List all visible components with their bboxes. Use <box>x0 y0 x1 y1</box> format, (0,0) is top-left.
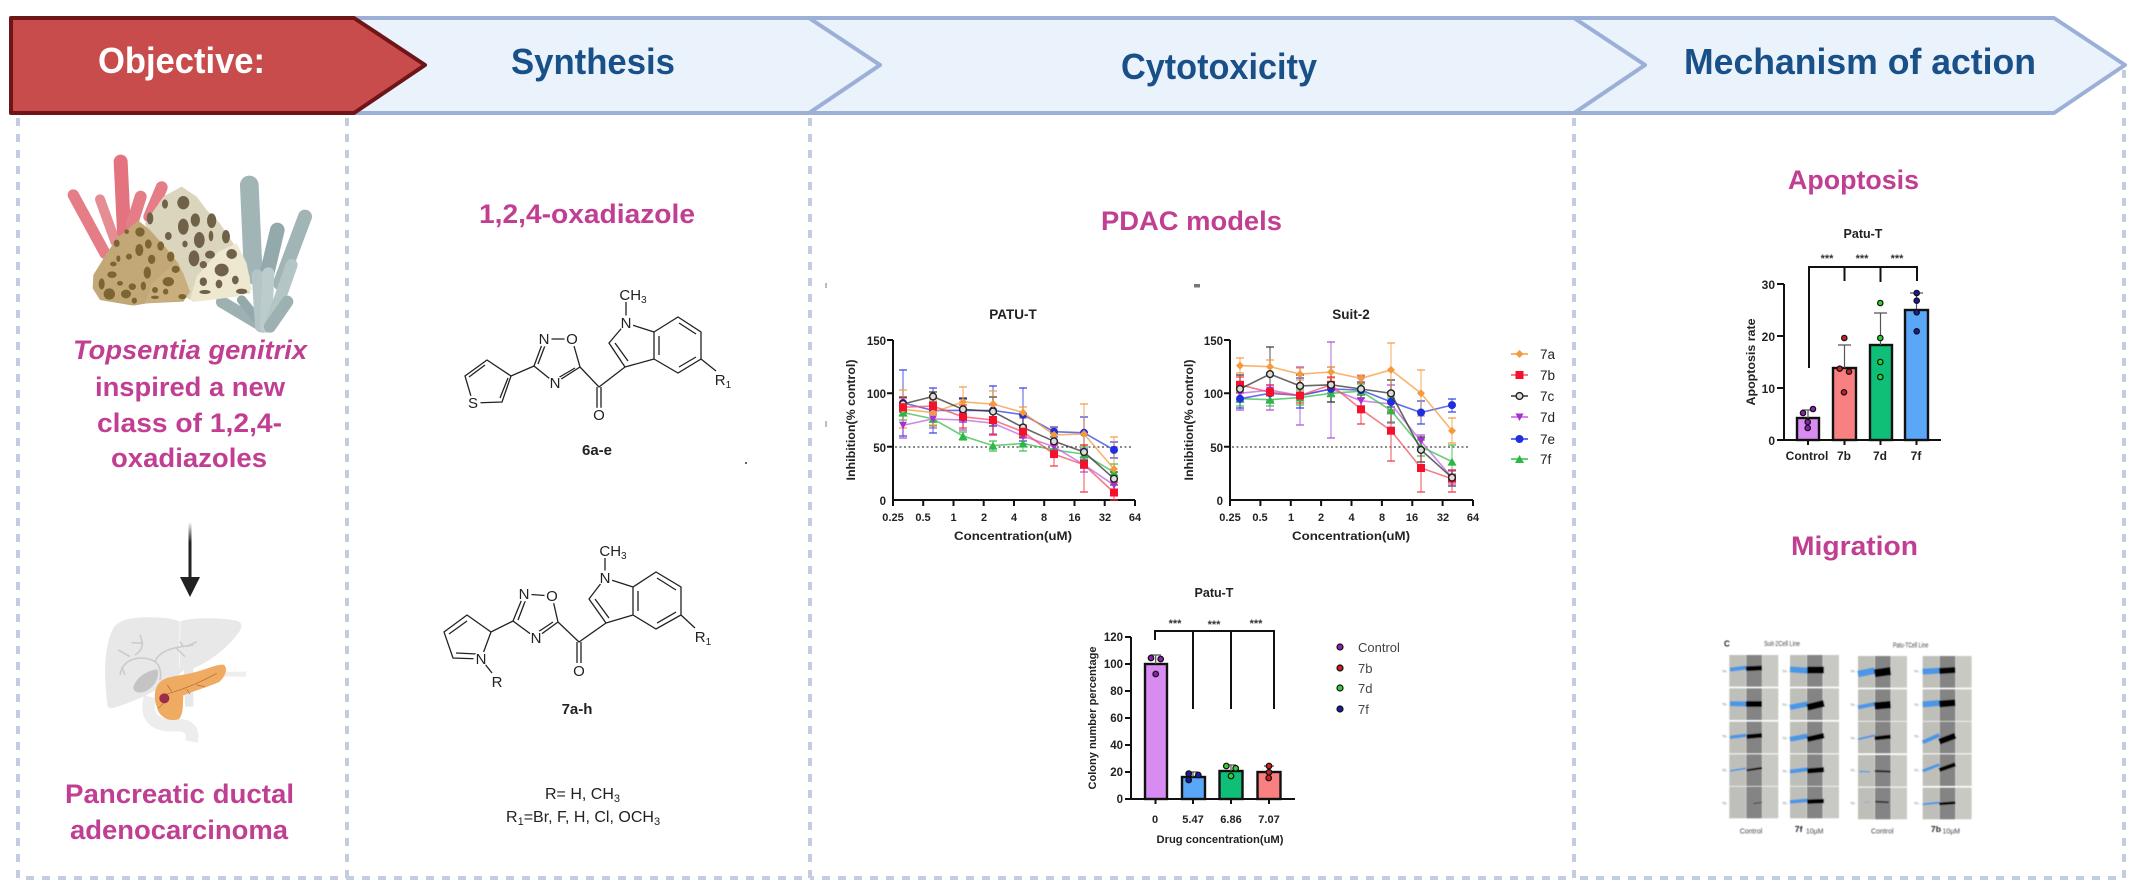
text: disease label: adenocarcinoma <box>70 815 289 845</box>
bar chart: apoptosis rate: 30 <box>1762 278 1775 292</box>
bar chart: apoptosis rate: Patu-T <box>1844 227 1883 241</box>
line chart: PATU-T: 16 <box>1068 512 1081 524</box>
bar chart: apoptosis rate: 7d <box>1873 449 1887 463</box>
bar chart: apoptosis rate: 10 <box>1762 382 1775 396</box>
chemical structure: 6a-e: O <box>566 331 578 348</box>
text: sponge caption: Topsentia genitrix <box>73 335 308 365</box>
chemical structure: 6a-e: 1 <box>726 380 732 391</box>
text: substituents: R <box>506 809 518 826</box>
text: substituents: R= H, CH <box>545 786 614 803</box>
figure: wound healing micrographs: T4 - <box>1914 669 1920 673</box>
figure: wound healing micrographs: T4 - <box>1782 736 1788 740</box>
figure: wound healing micrographs: T4 - <box>1722 735 1728 739</box>
figure: wound healing micrographs: 10µM <box>1942 828 1960 835</box>
chevron: mechanism of action: Mechanism of action <box>1684 41 2036 82</box>
legend: colony chart: 7b <box>1358 661 1372 676</box>
chevron: objective <box>11 18 425 113</box>
figure: wound healing micrographs: 7b <box>1931 824 1941 834</box>
bar chart: colony number: 5.47 <box>1182 814 1204 826</box>
chemical structure: 6a-e: O <box>593 407 605 424</box>
header: process chevrons <box>11 18 2125 113</box>
bar chart: apoptosis rate <box>1744 227 1941 463</box>
chemical structure: 6a-e: N <box>539 331 549 348</box>
legend: compounds 7a to 7f: 7a <box>1540 347 1556 362</box>
heading: Migration: Migration <box>1791 531 1918 561</box>
line chart: PATU-T: 32 <box>1099 512 1111 524</box>
chemical structure: 7a-h: O <box>573 663 585 680</box>
bar chart: apoptosis rate: 7b <box>1837 449 1851 463</box>
chevron: cytotoxicity: Cytotoxicity <box>1121 46 1317 87</box>
line chart: PATU-T: 100 <box>867 389 886 401</box>
chemical structure: 7a-h: O <box>546 588 558 605</box>
chemical structure: 6a-e: 6a-e <box>582 442 612 459</box>
line chart: Suit-2: 1 <box>1288 512 1294 524</box>
line chart: PATU-T: 50 <box>873 443 886 455</box>
chemical structure: 6a-e: S <box>468 395 478 412</box>
figure: wound healing micrographs: Patu-TCell Line <box>1893 643 1928 650</box>
text: substituents: 3 <box>614 793 620 805</box>
legend: compounds 7a to 7f <box>1511 347 1556 467</box>
chevron: synthesis: Synthesis <box>511 41 675 82</box>
bar chart: colony number: Patu-T <box>1195 586 1234 600</box>
figure: wound healing micrographs: Suit-2Cell Line <box>1764 641 1800 648</box>
figure: wound healing micrographs: T4 - <box>1850 736 1856 740</box>
chemical structure: 7a-h: N <box>531 630 541 647</box>
figure: wound healing micrographs: T0 - <box>1782 770 1788 774</box>
line chart: Suit-2: 4 <box>1348 512 1355 524</box>
bar chart: colony number: 40 <box>1110 740 1123 752</box>
figure: wound healing micrographs: T0 - <box>1914 801 1920 805</box>
bar chart: colony number <box>1087 586 1295 846</box>
chemical structure: 7a-h: R <box>492 674 503 691</box>
line chart: PATU-T: 8 <box>1041 512 1047 524</box>
figure: wound healing micrographs: T4 - <box>1914 703 1920 707</box>
chemical structure: 7a-h: N <box>600 570 610 587</box>
bar chart: colony number: 7.07 <box>1258 814 1280 826</box>
bar chart: colony number: *** <box>1169 618 1182 630</box>
figure: wound healing micrographs: T0 - <box>1782 801 1788 805</box>
chemical structure: 6a-e: R <box>715 372 726 389</box>
heading: Apoptosis: Apoptosis <box>1788 165 1919 195</box>
text: sponge caption <box>73 335 308 473</box>
figure: wound healing micrographs: T4 - <box>1782 669 1788 673</box>
chemical structure: 7a-h: 1 <box>706 637 712 648</box>
bar chart: apoptosis rate: 7f <box>1911 449 1922 463</box>
chemical structure: 7a-h: 7a-h <box>562 701 592 718</box>
legend: compounds 7a to 7f: 7c <box>1540 389 1555 404</box>
figure: wound healing micrographs: T0 - <box>1850 768 1856 772</box>
figure: wound healing micrographs: T0 - <box>1722 801 1728 805</box>
figure: wound healing micrographs: T4 - <box>1722 669 1728 673</box>
chemical structure: 6a-e <box>465 287 732 459</box>
text: disease label: Pancreatic ductal <box>65 779 294 809</box>
chemical structure: 6a-e: N <box>550 375 560 392</box>
panel: objective <box>18 118 347 878</box>
chemical structure: 7a-h: N <box>476 651 486 668</box>
figure: wound healing micrographs: T0 - <box>1914 768 1920 772</box>
bar chart: colony number: Drug concentration(uM) <box>1156 834 1284 846</box>
panel: mechanism of action <box>1574 70 2124 878</box>
chemical structure: 6a-e: 3 <box>641 295 647 306</box>
text: substituents <box>506 786 660 828</box>
bar chart: colony number: 0 <box>1152 814 1158 826</box>
chemical structure: 6a-e: N <box>621 315 631 332</box>
line chart: PATU-T: 0.25 <box>882 512 904 524</box>
chevron: mechanism of action <box>1574 18 2125 113</box>
line chart: Suit-2: Concentration(uM) <box>1292 529 1410 543</box>
bar chart: colony number: 80 <box>1110 686 1123 698</box>
figure: wound healing micrographs: T4 - <box>1850 669 1856 673</box>
text: sponge caption: class of 1,2,4- <box>97 408 282 438</box>
line chart: PATU-T: 1 <box>950 512 957 524</box>
chemical structure: 7a-h: CH <box>599 543 621 560</box>
bar chart: apoptosis rate: Control <box>1786 449 1828 463</box>
figure: wound healing micrographs: Control <box>1871 828 1894 835</box>
chemical structure: 7a-h: 3 <box>621 551 627 562</box>
text: substituents: 3 <box>654 816 660 828</box>
legend: compounds 7a to 7f: 7d <box>1540 410 1555 425</box>
line chart: Suit-2: 50 <box>1210 443 1223 455</box>
text: substituents: =Br, F, H, Cl, OCH <box>524 809 654 826</box>
figure: wound healing micrographs: T0 - <box>1850 801 1856 805</box>
chemical structure: 7a-h <box>444 543 712 718</box>
line chart: PATU-T: 64 <box>1129 512 1142 524</box>
line chart: PATU-T: 0 <box>880 496 886 508</box>
legend: colony chart: 7d <box>1358 681 1372 696</box>
bar chart: colony number: 60 <box>1110 713 1123 725</box>
bar chart: apoptosis rate: *** <box>1891 253 1904 265</box>
line chart: Suit-2: 64 <box>1467 512 1480 524</box>
bar chart: colony number: 120 <box>1104 632 1123 644</box>
panel: cytotoxicity <box>810 118 1574 878</box>
line chart: Suit-2: Inhibition(% control) <box>1182 360 1196 480</box>
bar chart: colony number: 100 <box>1104 659 1123 671</box>
line chart: PATU-T: 4 <box>1011 512 1018 524</box>
bar chart: apoptosis rate: 20 <box>1762 330 1775 344</box>
text: sponge caption: oxadiazoles <box>111 443 267 473</box>
chevron: synthesis <box>354 18 880 113</box>
legend: colony chart: 7f <box>1358 702 1369 717</box>
line chart: PATU-T: Inhibition(% control) <box>844 360 858 480</box>
illustration: liver and pancreas <box>105 617 246 742</box>
text: disease label <box>65 779 294 845</box>
bar chart: colony number: *** <box>1250 618 1263 630</box>
line chart: PATU-T: 150 <box>867 336 886 348</box>
bar chart: colony number: 6.86 <box>1220 814 1242 826</box>
legend: compounds 7a to 7f: 7f <box>1540 452 1552 467</box>
line chart: Suit-2: Suit-2 <box>1332 307 1370 322</box>
line chart: Suit-2: 32 <box>1437 512 1449 524</box>
figure: wound healing micrographs: T4 - <box>1722 702 1728 706</box>
bar chart: colony number: 0 <box>1117 794 1123 806</box>
legend: colony chart <box>1337 640 1400 717</box>
bar chart: apoptosis rate: 0 <box>1768 434 1775 448</box>
illustration: Topsentia genitrix sponge <box>73 162 305 327</box>
chevron: objective: Objective: <box>98 40 265 81</box>
legend: colony chart: Control <box>1358 640 1400 655</box>
figure: wound healing micrographs: Control <box>1740 828 1763 835</box>
bar chart: apoptosis rate: *** <box>1856 253 1869 265</box>
line chart: PATU-T: 2 <box>981 512 987 524</box>
line chart: Suit-2: 0.5 <box>1252 512 1268 524</box>
legend: compounds 7a to 7f: 7b <box>1540 368 1555 383</box>
bar chart: colony number: *** <box>1208 619 1221 631</box>
figure: wound healing micrographs: T4 - <box>1850 703 1856 707</box>
line chart: Suit-2: 100 <box>1204 389 1223 401</box>
bar chart: apoptosis rate: Apoptosis rate <box>1744 318 1758 406</box>
line chart: Suit-2: 0 <box>1217 496 1223 508</box>
heading: PDAC models: PDAC models <box>1101 206 1282 236</box>
bar chart: apoptosis rate: *** <box>1821 253 1834 265</box>
chevron: cytotoxicity <box>809 18 1645 113</box>
figure: wound healing micrographs: T4 - <box>1914 735 1920 739</box>
figure: wound healing micrographs: 10µM <box>1806 828 1824 835</box>
line chart: Suit-2: 0.25 <box>1219 512 1241 524</box>
text: sponge caption: inspired a new <box>95 372 286 402</box>
figure: wound healing micrographs: C <box>1724 640 1730 649</box>
chemical structure: 6a-e: CH <box>619 287 641 304</box>
panel: synthesis <box>347 118 810 878</box>
figure: wound healing micrographs: 7f <box>1795 824 1803 834</box>
line chart: Suit-2: 2 <box>1318 512 1324 524</box>
chemical structure: 7a-h: R <box>695 629 706 646</box>
figure: wound healing micrographs: T0 - <box>1722 768 1728 772</box>
line chart: Suit-2: 16 <box>1406 512 1418 524</box>
legend: compounds 7a to 7f: 7e <box>1540 432 1555 447</box>
chemical structure: 7a-h: N <box>519 586 529 603</box>
heading: 1,2,4-oxadiazole: 1,2,4-oxadiazole <box>479 199 695 229</box>
line chart: PATU-T: 0.5 <box>915 512 931 524</box>
line chart: PATU-T: PATU-T <box>989 307 1037 322</box>
line chart: Suit-2: 8 <box>1379 512 1385 524</box>
figure: wound healing micrographs: T4 - <box>1782 703 1788 707</box>
bar chart: colony number: 20 <box>1110 767 1123 779</box>
line chart: PATU-T: Concentration(uM) <box>954 529 1072 543</box>
bar chart: colony number: Colony number percentage <box>1087 646 1099 790</box>
line chart: Suit-2 <box>1182 307 1480 543</box>
figure: wound healing micrographs <box>1722 640 1972 835</box>
line chart: Suit-2: 150 <box>1204 336 1223 348</box>
line chart: PATU-T <box>844 307 1142 543</box>
arrow: sponge to cancer <box>180 522 200 597</box>
text: substituents: 1 <box>518 816 524 828</box>
